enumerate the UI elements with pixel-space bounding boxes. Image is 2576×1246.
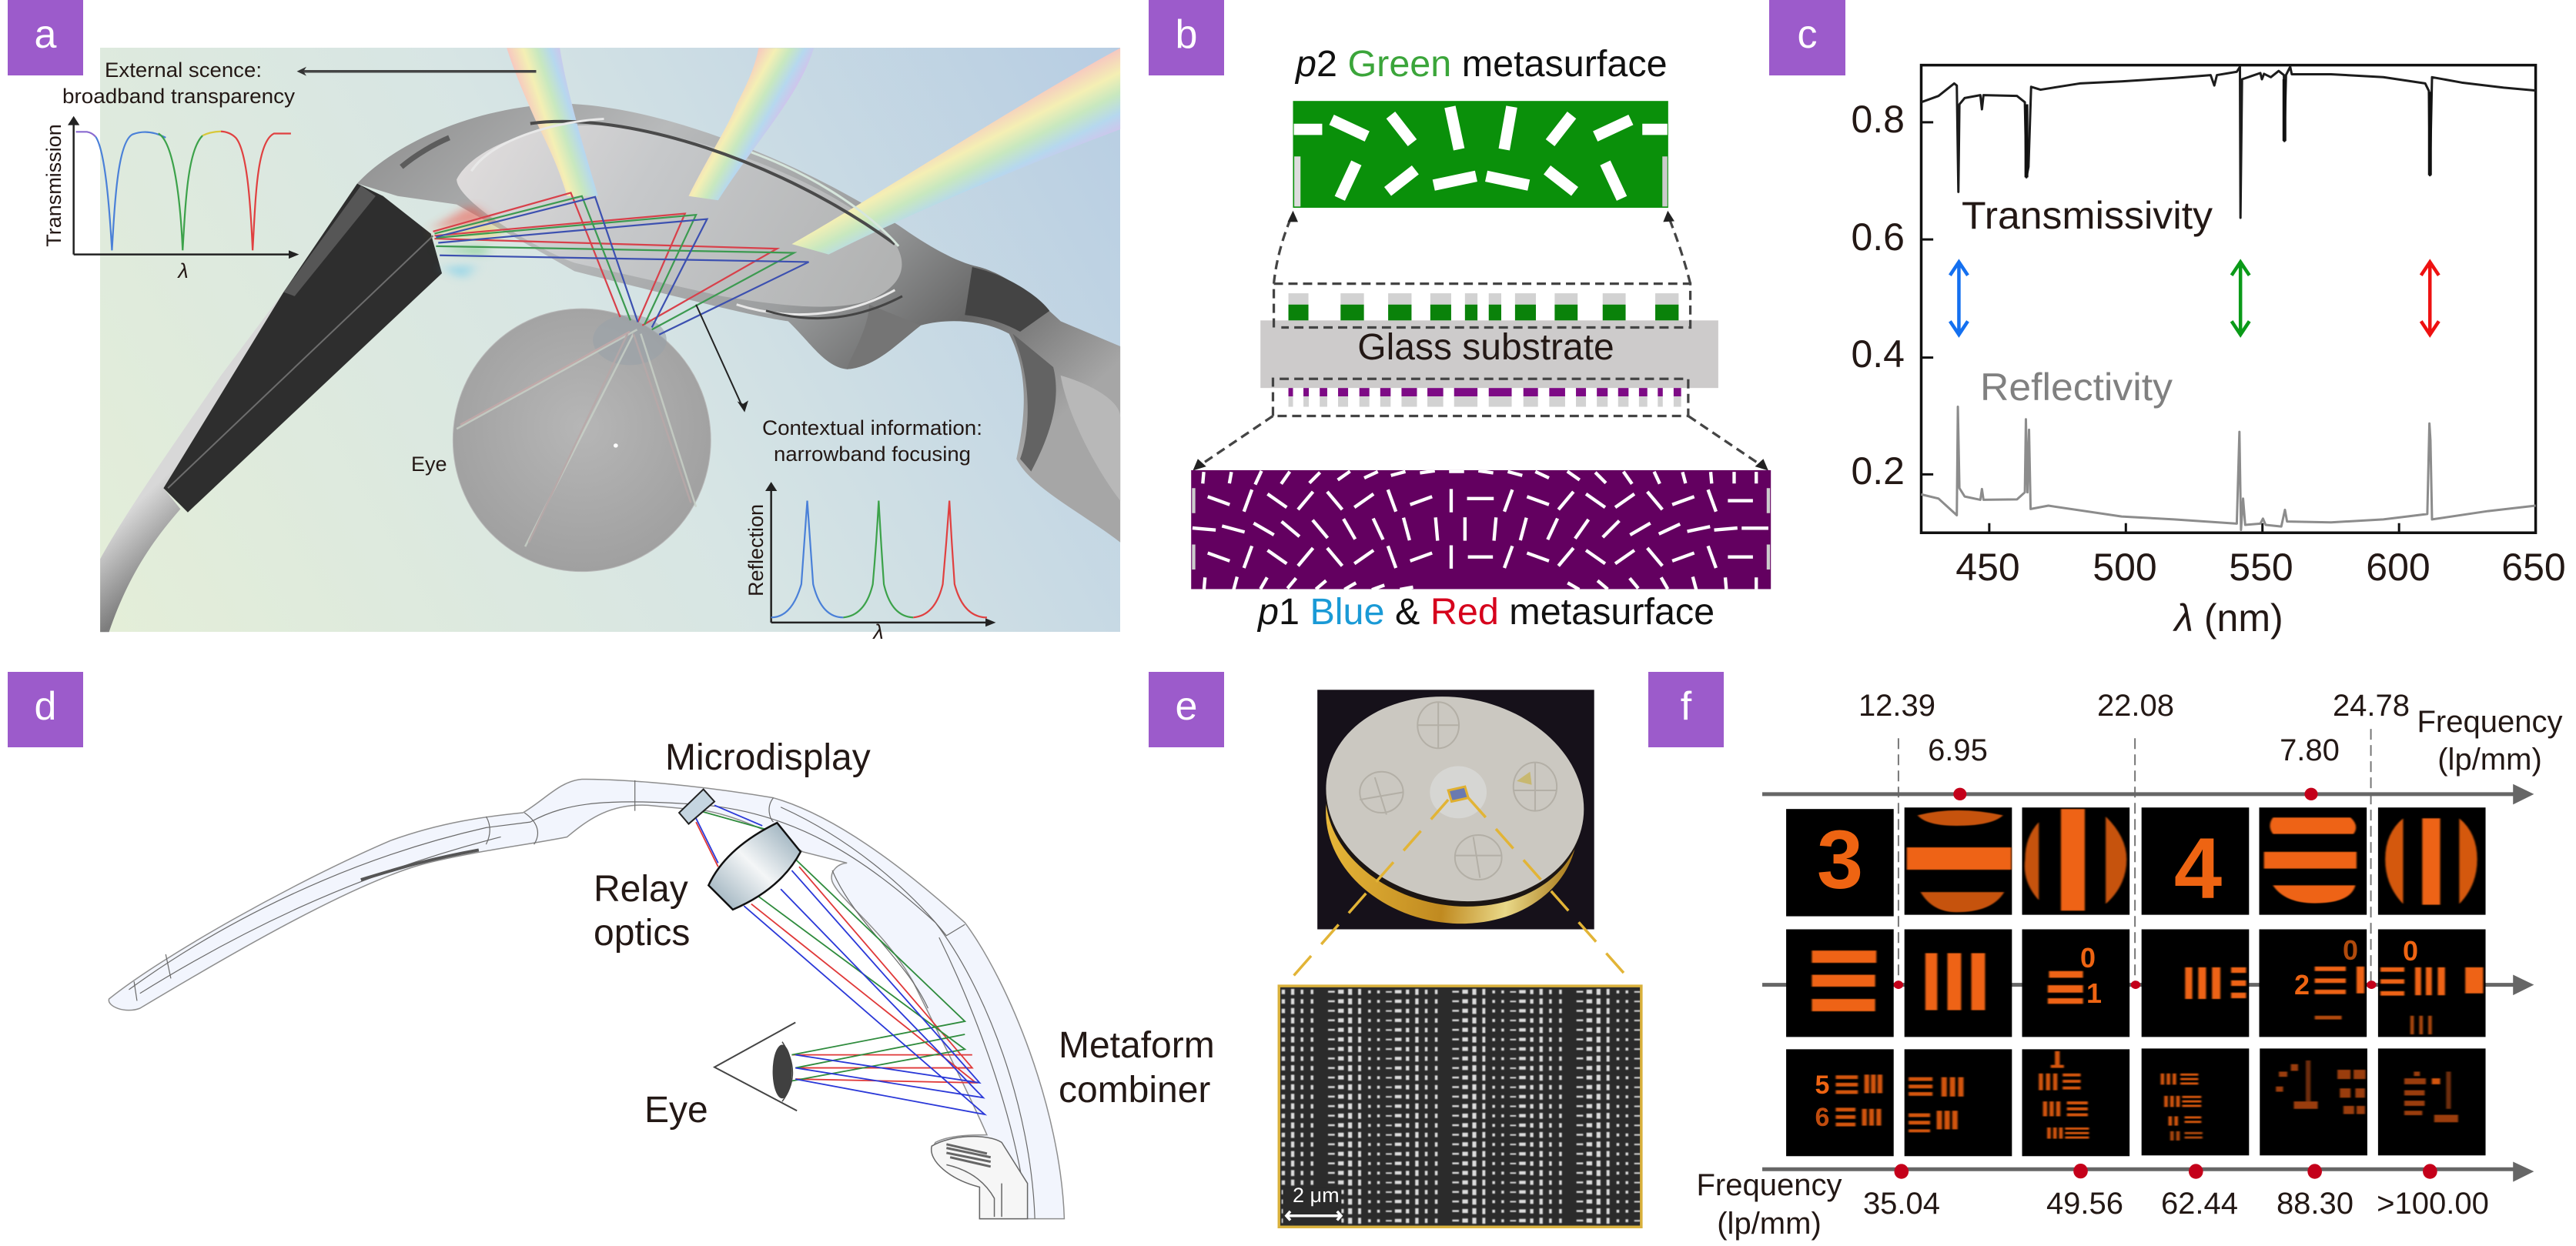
inner frame lines <box>129 780 1035 1219</box>
x axis tick labels: 600 <box>2366 546 2430 589</box>
lower frequency values: 35.04 <box>1863 1187 1940 1221</box>
dashed zoom guides <box>1197 215 1765 467</box>
panel d labels: optics <box>594 913 690 954</box>
purple metasurface <box>1191 470 1771 590</box>
illustration: glasses, beams and eye <box>68 48 1120 632</box>
title: p1 blue and red metasurface: p1 Blue & Red metasurface <box>1256 591 1715 633</box>
dark inner temple detail <box>361 850 479 880</box>
eye sphere <box>453 309 711 572</box>
upper frequency values: 7.80 <box>2280 733 2340 767</box>
label f <box>1648 672 1724 747</box>
label e <box>1149 672 1224 747</box>
label a: a <box>35 12 57 57</box>
row 3 dim high-frequency patterns <box>2276 1061 2458 1122</box>
light rays to the eye <box>433 192 808 335</box>
x axis tick labels: 500 <box>2093 546 2157 589</box>
SEM image <box>1279 986 1641 1227</box>
red double arrow <box>2421 262 2439 335</box>
green metasurface <box>1293 101 1668 208</box>
y axis tick labels: 0.4 <box>1851 332 1905 376</box>
panel a texts: Contextual information: <box>762 416 982 439</box>
rainbow beams <box>507 48 1120 255</box>
plot frame and ticks <box>1921 65 2536 533</box>
lower frequency values: >100.00 <box>2377 1187 2489 1221</box>
upper frequency axis label <box>2417 705 2562 777</box>
reflectivity label: Reflectivity <box>1980 366 2173 409</box>
panel a texts: λ <box>871 620 884 643</box>
panel d labels: Eye <box>644 1090 708 1131</box>
label b <box>1149 0 1224 75</box>
tile digits: 0 <box>2080 942 2096 974</box>
panel d labels: combiner <box>1059 1070 1210 1111</box>
label b: b <box>1176 12 1197 57</box>
bottom arrow <box>696 305 748 413</box>
tile digits: 4 <box>2174 820 2222 917</box>
label f: f <box>1681 684 1692 729</box>
panel a texts: λ <box>176 259 189 282</box>
glass substrate <box>1260 320 1718 388</box>
panel f: imaging resolution <box>1648 672 2562 1241</box>
relay lens <box>708 823 801 910</box>
panel c: spectrum chart <box>1769 0 2566 640</box>
green double arrow <box>2232 262 2250 335</box>
glass substrate label: Glass substrate <box>1357 327 1614 368</box>
upper frequency values <box>1858 689 2410 767</box>
lower frequency axis label: (lp/mm) <box>1717 1207 1822 1241</box>
top arrow <box>297 67 536 76</box>
microdisplay <box>679 790 714 824</box>
tile digits: 3 <box>1817 813 1863 906</box>
y axis tick labels <box>1851 98 1905 493</box>
title: p2 green metasurface: p2 Green metasurface <box>1294 43 1668 85</box>
label c: c <box>1797 12 1817 57</box>
upper frequency values: 24.78 <box>2333 689 2410 723</box>
panel b: metasurface structure <box>1149 0 1771 633</box>
scale bar <box>1286 1211 1341 1221</box>
image tiles <box>1786 807 2486 1156</box>
lower frequency values: 62.44 <box>2161 1187 2238 1221</box>
light source glow <box>431 205 501 279</box>
y axis tick labels: 0.8 <box>1851 98 1905 141</box>
y axis tick labels: 0.6 <box>1851 215 1905 259</box>
temple and lens outline <box>109 779 1064 1219</box>
plot curves and arrows <box>1921 65 2536 533</box>
blue double arrow <box>1950 262 1968 335</box>
x axis tick labels: 650 <box>2501 546 2566 589</box>
lower frequency values: 88.30 <box>2277 1187 2354 1221</box>
panel d labels: Metaform <box>1059 1025 1215 1066</box>
eye icon <box>714 1023 797 1111</box>
upper frequency values: 12.39 <box>1858 689 1935 723</box>
tile digits <box>1815 813 2418 1132</box>
rays inside the eye <box>457 329 696 546</box>
label e: e <box>1176 684 1197 729</box>
frame highlights <box>401 119 902 319</box>
metasurface drawing <box>1191 101 1771 590</box>
panel d: optical layout <box>8 672 1215 1219</box>
upper frequency values: 6.95 <box>1928 733 1988 767</box>
pupil glint <box>614 443 618 448</box>
panel a: AR glasses illustration <box>8 0 1120 643</box>
label d <box>8 672 83 747</box>
reflection chart <box>765 482 995 626</box>
transmission chart <box>68 116 299 259</box>
lower frequency values: 49.56 <box>2046 1187 2123 1221</box>
transmissivity label: Transmissivity <box>1962 194 2213 237</box>
upper nano-pillars <box>1289 293 1678 320</box>
left lens <box>457 125 902 307</box>
row 3 test patterns <box>1835 1051 2203 1141</box>
frequency axes <box>1762 784 2534 1182</box>
upper frequency values: 22.08 <box>2097 689 2174 723</box>
panel d labels: Relay <box>594 869 688 910</box>
row 1 test patterns <box>1907 809 2477 912</box>
row 2 test patterns <box>1812 950 2483 1034</box>
temple black housing <box>163 184 442 513</box>
reflectivity curve <box>1921 407 2536 529</box>
gold dashed guides <box>1286 798 1634 984</box>
lower frequency values <box>1863 1187 2489 1221</box>
x axis tick labels: 450 <box>1955 546 2020 589</box>
red frequency markers <box>1894 788 2437 1179</box>
label c <box>1769 0 1845 75</box>
dashed frequency guides <box>1899 729 2371 982</box>
tile digits: 5 <box>1815 1071 1829 1100</box>
guide arrowheads <box>1193 211 1768 470</box>
panel a texts: Eye <box>411 453 447 476</box>
colored rays <box>696 805 985 1114</box>
x axis title: λ (nm) <box>2172 596 2283 640</box>
tile digits: 2 <box>2294 969 2310 1000</box>
lower frequency axis label <box>1697 1168 1842 1241</box>
panel a texts: broadband transparency <box>62 85 296 108</box>
label a <box>8 0 83 75</box>
panel a texts: Reflection <box>744 504 768 596</box>
glasses scene background <box>100 48 1120 632</box>
y axis tick labels: 0.2 <box>1851 449 1905 493</box>
glasses top view <box>109 779 1064 1219</box>
tile digits: 0 <box>2403 935 2418 967</box>
nose pad <box>932 1137 1028 1219</box>
x axis tick labels: 550 <box>2229 546 2293 589</box>
upper frequency axis label: Frequency <box>2417 705 2562 739</box>
panel a texts: External scence: <box>105 58 262 82</box>
panel a texts: Transmission <box>42 124 65 247</box>
x axis tick labels <box>1955 546 2566 589</box>
panel a texts <box>42 58 982 643</box>
panel a texts: narrowband focusing <box>774 443 971 466</box>
panel d labels: Microdisplay <box>665 737 871 778</box>
panel d labels <box>594 737 1215 1131</box>
upper frequency axis label: (lp/mm) <box>2437 743 2542 777</box>
wafer photo <box>1314 679 1596 940</box>
lower frequency axis label: Frequency <box>1697 1168 1842 1202</box>
lower nano-pillars <box>1289 388 1681 407</box>
tile digits: 6 <box>1815 1103 1829 1132</box>
right lens and frame body <box>100 103 1120 632</box>
tile digits: 0 <box>2343 934 2358 966</box>
tile digits: 1 <box>2086 977 2102 1009</box>
label d: d <box>35 684 56 729</box>
transmissivity curve <box>1921 67 2536 218</box>
scale bar text: 2 μm <box>1293 1184 1340 1207</box>
panel e: wafer photo and SEM <box>1149 672 1641 1227</box>
